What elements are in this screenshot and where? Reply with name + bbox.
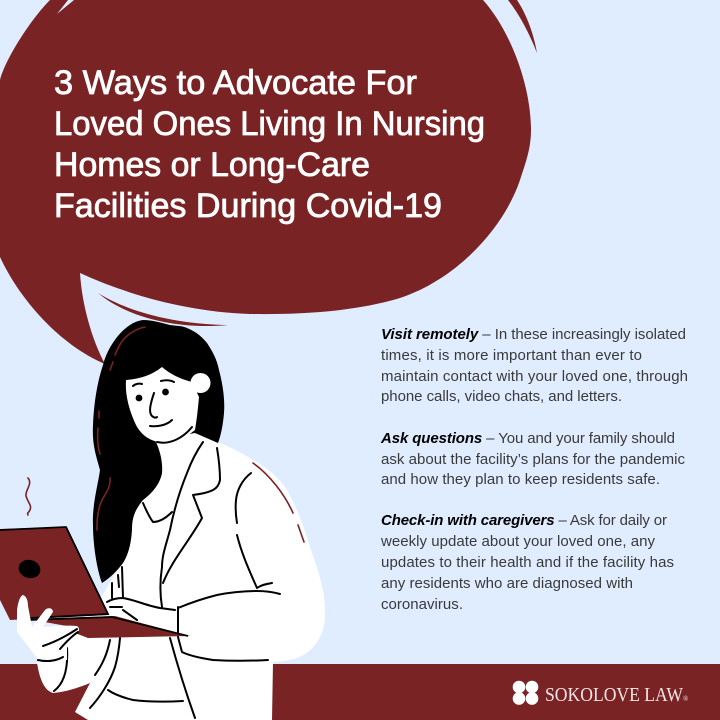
logo mark [513, 681, 538, 705]
text block: ask questions: and how they plan to keep residents safe. [381, 471, 660, 488]
title: 3 Ways to Advocate For [54, 64, 417, 102]
text block: visit remotely: times, it is more important than ever to [381, 347, 642, 364]
title [54, 64, 485, 225]
text block: visit remotely: maintain contact with your loved one, through [381, 368, 688, 385]
title: Loved Ones Living In Nursing [54, 105, 485, 143]
ear [190, 373, 210, 393]
steam squiggle [26, 478, 31, 515]
hair [93, 320, 224, 583]
speech bubble [0, 0, 537, 364]
text block: check-in with caregivers: weekly update about your loved one, any [380, 533, 656, 550]
coat lines [38, 442, 280, 718]
title: Facilities During Covid-19 [54, 187, 442, 225]
face [126, 367, 199, 443]
illustration: woman with laptop [0, 320, 325, 720]
laptop [0, 527, 190, 638]
text block: check-in with caregivers: coronavirus. [381, 596, 463, 613]
text block: check-in with caregivers [380, 512, 674, 613]
logo [513, 681, 689, 706]
title: Homes or Long-Care [54, 146, 370, 184]
footer band [0, 664, 720, 720]
body and coat [37, 425, 325, 720]
text block: visit remotely [381, 326, 688, 405]
text block: check-in with caregivers: any residents who are diagnosed with [381, 575, 633, 592]
text block: ask questions [380, 430, 686, 488]
text block: ask questions: Ask questions – You and your family should [380, 430, 675, 447]
red accents [97, 327, 304, 542]
hand [17, 595, 79, 662]
text block: ask questions: ask about the facility’s plans for the pandemic [381, 451, 686, 468]
text block: check-in with caregivers: Check-in with caregivers – Ask for daily or [381, 512, 667, 529]
text block: check-in with caregivers: updates to their health and if the facility has [381, 554, 674, 571]
facial features [133, 380, 192, 443]
text block: visit remotely: phone calls, video chats, and letters. [381, 388, 622, 405]
text block: visit remotely: Visit remotely – In these increasingly isolated [381, 326, 686, 343]
logo wordmark: SOKOLOVE LAW® [545, 684, 689, 706]
